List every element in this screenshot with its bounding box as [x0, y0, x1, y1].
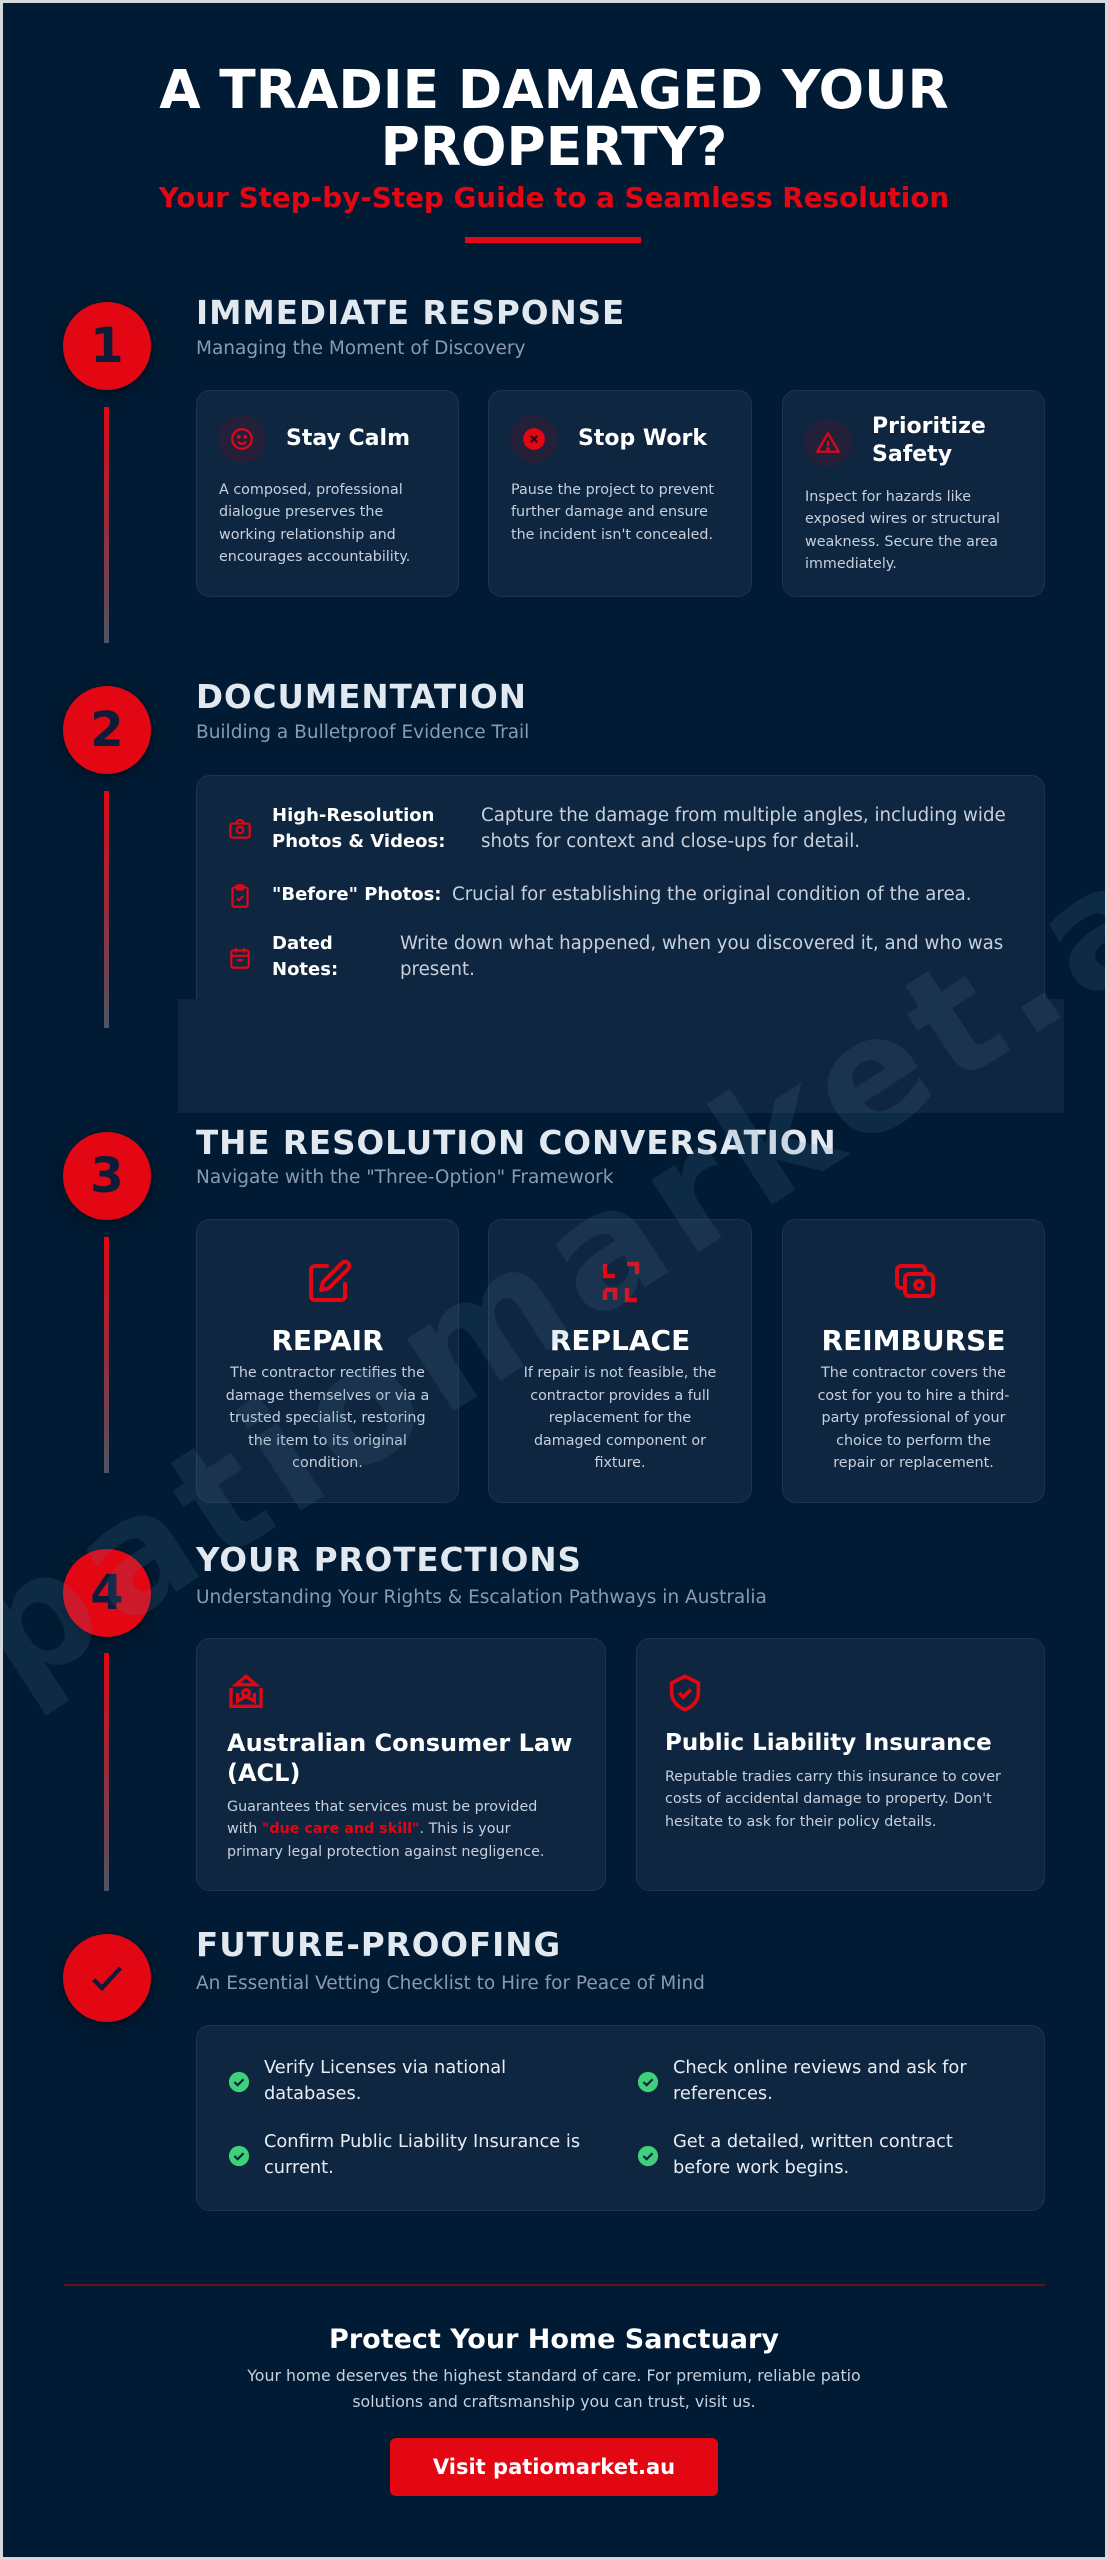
step 4 heading: YOUR PROTECTIONS	[196, 1541, 582, 1579]
item: high-res	[272, 805, 445, 852]
option: replace	[488, 1219, 752, 1503]
check item 1	[228, 2072, 250, 2092]
icon: money	[895, 1264, 935, 1298]
step 1 heading: IMMEDIATE RESPONSE	[196, 294, 625, 332]
item: high-res: High-Resolution	[272, 805, 434, 826]
option: replace: If repair is not feasible, the contractor provides a full replacement for the damaged component or fixture.	[524, 1365, 716, 1471]
title	[159, 58, 949, 178]
step 3 circle: 3	[90, 1148, 124, 1204]
checklist panel: Get a detailed, written contract before work begins.	[673, 2131, 953, 2178]
icon: camera	[229, 819, 251, 839]
card title: Prioritize	[872, 414, 986, 439]
item: before photos: "Before" Photos:	[272, 884, 442, 905]
step 3 circle	[63, 1132, 151, 1220]
checklist panel: Confirm Public Liability Insurance is current.	[264, 2131, 580, 2178]
step 1 line	[104, 407, 109, 643]
icon: stop	[510, 415, 558, 463]
title underline	[465, 237, 641, 243]
step 3 subheading: Navigate with the "Three-Option" Framework	[196, 1167, 613, 1188]
item: dated notes: Dated	[272, 933, 333, 954]
card: ACL: Australian Consumer Law (ACL)	[227, 1729, 572, 1787]
card: ACL	[196, 1638, 606, 1891]
title: A TRADIE DAMAGED YOUR	[159, 58, 949, 121]
step 4 circle	[63, 1549, 151, 1637]
step 1 circle: 1	[90, 318, 124, 374]
card title: Stop Work	[578, 426, 707, 451]
card: public liability: Public Liability Insurance	[665, 1730, 992, 1756]
card text: Inspect for hazards like exposed wires or structural weakness. Secure the area immediately.	[805, 489, 1000, 572]
step 4 subheading: Understanding Your Rights & Escalation Pathways in Australia	[196, 1587, 767, 1608]
checklist panel	[196, 2025, 1045, 2211]
card text: Pause the project to prevent further damage and ensure the incident isn't concealed.	[511, 482, 714, 543]
step 2 line	[104, 791, 109, 1028]
card: public liability	[636, 1638, 1045, 1891]
check item 3	[228, 2146, 250, 2166]
step 2 subheading: Building a Bulletproof Evidence Trail	[196, 722, 529, 743]
item: dated notes: Notes:	[272, 959, 338, 980]
documentation panel: Write down what happened, when you discovered it, and who was present.	[400, 933, 1003, 980]
CTA button: Visit patiomarket.au	[433, 2455, 675, 2479]
option: repair	[196, 1219, 459, 1503]
icon: shield	[670, 1674, 700, 1712]
checklist panel: Check online reviews and ask for references.	[673, 2057, 967, 2104]
documentation panel: Capture the damage from multiple angles, including wide shots for context and close-ups for detail.	[481, 805, 1006, 852]
option: replace: REPLACE	[550, 1324, 690, 1357]
documentation panel	[196, 775, 1045, 1075]
footer text: Your home deserves the highest standard of care. For premium, reliable patio solutions and craftsmanship you can trust, visit us.	[247, 2366, 861, 2411]
step 5 heading: FUTURE-PROOFING	[196, 1926, 561, 1964]
icon: edit	[309, 1260, 352, 1302]
option: reimburse: REIMBURSE	[822, 1324, 1005, 1357]
step 2 circle: 2	[90, 702, 124, 758]
card: ACL: Guarantees that services must be provided with "due care and skill". This is your primary legal protection against negligence.	[227, 1799, 544, 1860]
option: repair: REPAIR	[271, 1324, 384, 1357]
card title: Stay Calm	[286, 426, 410, 451]
card: public liability: Reputable tradies carry this insurance to cover costs of accidental damage to property. Don't hesitate to ask for their policy details.	[665, 1769, 1001, 1830]
icon: law	[229, 1674, 263, 1708]
icon: clipboard	[231, 884, 249, 908]
icon: replace	[602, 1262, 640, 1302]
check item 2	[638, 2072, 658, 2092]
card title	[872, 414, 986, 467]
icon: calendar	[230, 948, 250, 969]
subtitle: Your Step-by-Step Guide to a Seamless Resolution	[159, 181, 949, 214]
step 4 circle: 4	[90, 1565, 124, 1621]
step 2 heading: DOCUMENTATION	[196, 678, 527, 716]
option: reimburse: The contractor covers the cost for you to hire a third-party professional of your choice to perform the repair or replacement.	[818, 1365, 1009, 1471]
step 2 circle	[63, 686, 151, 774]
card title: Safety	[872, 442, 952, 467]
item: high-res: Photos & Videos:	[272, 831, 445, 852]
card text: A composed, professional dialogue preserves the working relationship and encourages accountability.	[219, 482, 410, 565]
icon: smile	[218, 415, 266, 463]
item: dated notes	[272, 933, 338, 980]
icon: warning	[804, 419, 852, 467]
checklist panel: Verify Licenses via national databases.	[264, 2057, 506, 2104]
step 3 heading: THE RESOLUTION CONVERSATION	[196, 1124, 837, 1162]
documentation panel: Crucial for establishing the original condition of the area.	[452, 884, 972, 905]
step 1 subheading: Managing the Moment of Discovery	[196, 338, 526, 359]
title: PROPERTY?	[381, 115, 727, 178]
footer heading: Protect Your Home Sanctuary	[329, 2324, 779, 2355]
step 5 subheading: An Essential Vetting Checklist to Hire for Peace of Mind	[196, 1973, 705, 1994]
panel extension block	[178, 999, 1064, 1113]
check item 4	[638, 2146, 658, 2166]
step 1 circle	[63, 302, 151, 390]
option: reimburse	[782, 1219, 1045, 1503]
option: repair: The contractor rectifies the damage themselves or via a trusted specialist, restoring the item to its original condition.	[226, 1365, 429, 1471]
step 5 circle: check	[63, 1934, 151, 2022]
card: stay calm	[196, 390, 459, 597]
CTA button	[390, 2438, 718, 2496]
step 4 line	[104, 1653, 109, 1891]
card: stop work	[488, 390, 752, 597]
step 3 line	[104, 1237, 109, 1473]
card: prioritize safety	[782, 390, 1045, 597]
